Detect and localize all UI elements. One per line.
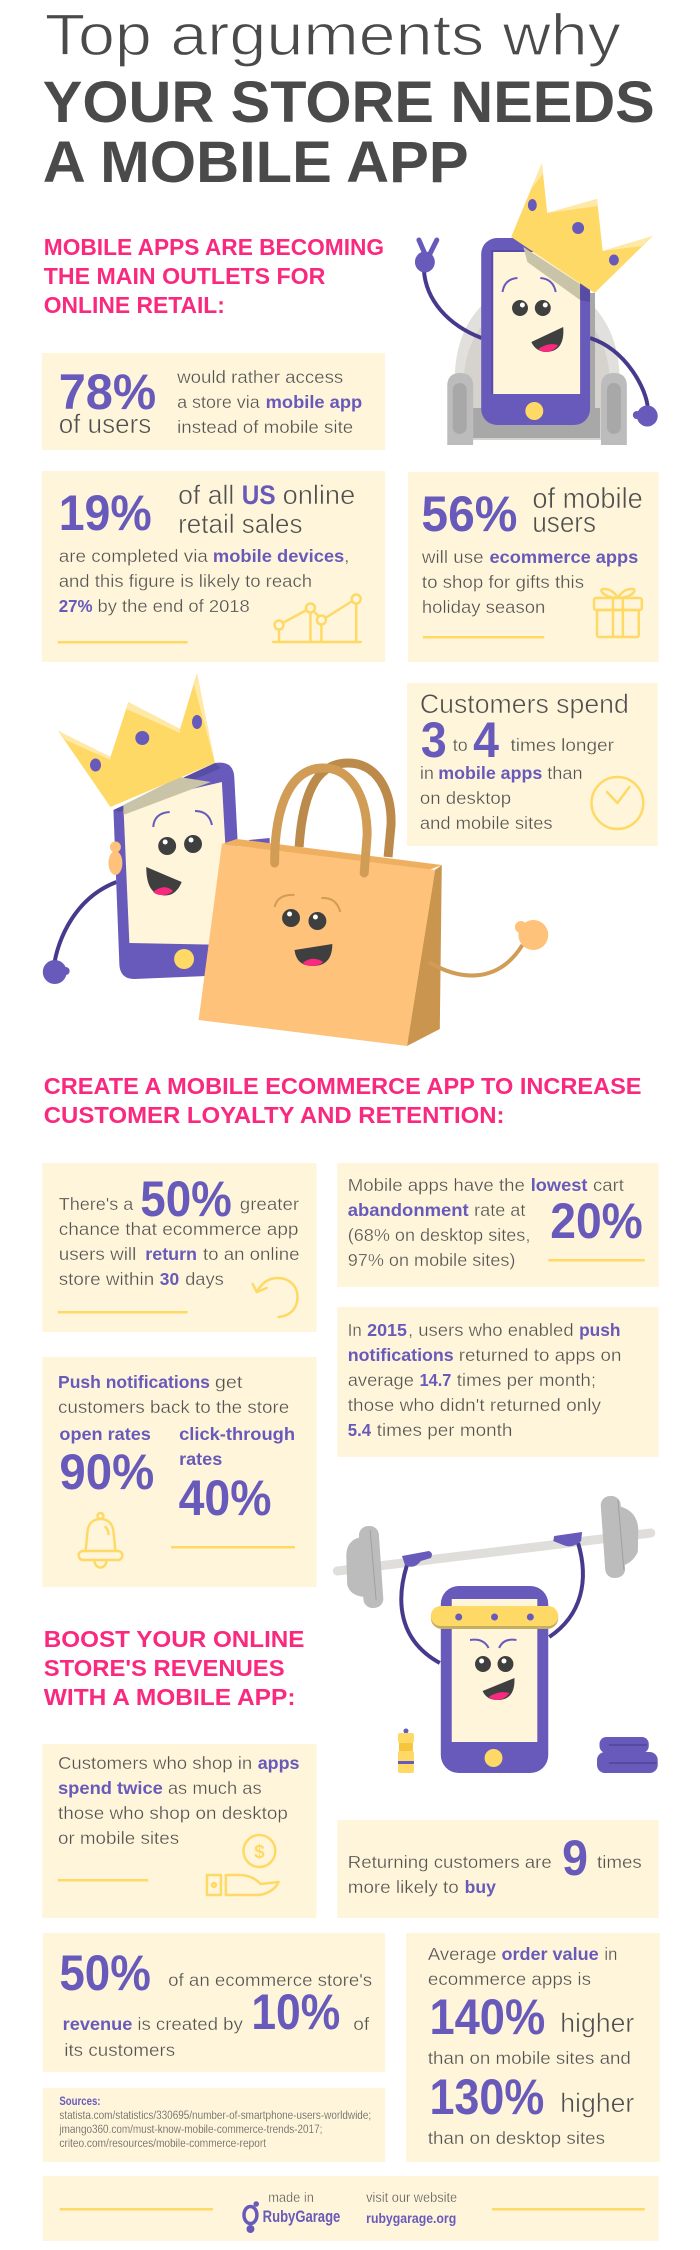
panel: 56% of mobile users: holiday season: [422, 597, 545, 617]
panel: push notifications open and click-through rates: [42, 1357, 316, 1587]
panel: push notifications open and click-through rates: 90%: [59, 1444, 154, 1500]
panel: customers spend 3 to 4 times longer: 4: [473, 712, 499, 768]
panel: 19% of US online retail sales: by the end of 2018: [98, 596, 250, 616]
panel: returning customers 9 times: [337, 1820, 659, 1918]
panel: 19% of US online retail sales: and this figure is likely to reach: [59, 571, 312, 591]
panel: average order value: 140%: [429, 1989, 545, 2045]
panel: customers spend 3 to 4 times longer: to: [453, 735, 468, 755]
heading: boost revenues: [44, 1626, 304, 1710]
panel: average order value: higher: [560, 2008, 634, 2038]
panel: 78% of users: instead of mobile site: [177, 417, 353, 437]
panel: customers spend twice: apps: [258, 1753, 300, 1773]
panel: 19% of US online retail sales: online: [283, 480, 355, 510]
panel: 50% of revenue from 10% of customers: 10%: [251, 1984, 340, 2040]
panel: 50% of revenue from 10% of customers: of: [353, 2014, 370, 2034]
panel: 50% greater chance: There's a: [59, 1194, 133, 1214]
panel: 19% of US online retail sales: are completed via: [59, 546, 208, 566]
panel: customers spend twice: [42, 1744, 316, 1918]
panel: 78% of users: a store via: [177, 392, 260, 412]
panel: 50% greater chance: 50%: [140, 1171, 232, 1227]
panel: 50% greater chance: days: [185, 1269, 224, 1289]
panel: 56% of mobile users: 56%: [421, 486, 517, 542]
panel: 78% of users: 78%: [59, 364, 156, 420]
panel: sources: Sources:: [59, 2096, 100, 2108]
panel: average order value: [406, 1933, 660, 2162]
panel: 50% greater chance: chance that ecommerce app: [59, 1219, 299, 1239]
panel: average order value: than on desktop sites: [428, 2128, 605, 2148]
footer: rubygarage.org: [366, 2210, 456, 2226]
panel: returning customers 9 times: 9: [562, 1830, 588, 1886]
panel: 50% greater chance: 30: [160, 1269, 179, 1289]
icon: return arrow: [253, 1278, 298, 1317]
illustration: phone character with crown in wheelchair: [415, 163, 658, 445]
panel: average order value: higher: [560, 2088, 634, 2118]
panel: 19% of US online retail sales: 27%: [59, 596, 93, 616]
panel: returning customers 9 times: buy: [465, 1877, 496, 1897]
panel: customers spend 3 to 4 times longer: mobile apps: [438, 763, 542, 783]
illustration: phone character lifting a barbell: [337, 1495, 651, 1773]
panel: 19% of US online retail sales: mobile devices: [213, 546, 344, 566]
footer: made in: [268, 2189, 314, 2205]
panel: 50% of revenue from 10% of customers: [43, 1933, 385, 2072]
title: A MOBILE APP: [43, 131, 469, 195]
illustration: crowned phone and shopping bag characters: [43, 673, 548, 1046]
panel: lowest cart abandonment 20%: 20%: [550, 1193, 643, 1249]
panel: customers spend twice: spend twice: [58, 1778, 163, 1798]
heading: main outlets: MOBILE APPS ARE BECOMING: [44, 234, 384, 260]
panel: 50% greater chance: store within: [59, 1269, 154, 1289]
panel: 56% of mobile users: users: [532, 507, 596, 539]
heading: boost revenues: BOOST YOUR ONLINE: [44, 1626, 304, 1652]
panel: lowest cart abandonment 20%: rate at: [474, 1200, 525, 1220]
panel: push notifications open and click-through rates: open rates: [59, 1424, 151, 1444]
panel: push notifications 2015: 5.4: [348, 1420, 371, 1440]
panel: 56% of mobile users: ecommerce apps: [490, 547, 638, 567]
heading: loyalty and retention: [44, 1073, 641, 1128]
panel: average order value: Average: [428, 1944, 497, 1964]
panel: customers spend 3 to 4 times longer: and mobile sites: [420, 813, 553, 833]
icon: stacked towels: [597, 1737, 658, 1773]
icon: hand with coin: [207, 1835, 279, 1895]
panel: push notifications 2015: average: [348, 1370, 414, 1390]
panel: lowest cart abandonment 20%: lowest: [531, 1175, 587, 1195]
panel: 50% of revenue from 10% of customers: revenue: [63, 2014, 132, 2034]
logo: RubyGarage: RubyGarage: [263, 2207, 340, 2226]
panel: push notifications open and click-through rates: get: [215, 1372, 242, 1392]
panel: push notifications 2015: 14.7: [420, 1370, 451, 1390]
icon: growth chart: [273, 594, 361, 642]
panel: 78% of users: mobile app: [266, 392, 362, 412]
heading: boost revenues: STORE'S REVENUES: [44, 1655, 285, 1681]
logo: RubyGarage: [244, 2201, 340, 2233]
title: [43, 4, 655, 195]
panel: 50% of revenue from 10% of customers: its customers: [64, 2040, 175, 2060]
panel: customers spend 3 to 4 times longer: than: [547, 763, 583, 783]
heading: boost revenues: WITH A MOBILE APP:: [44, 1684, 296, 1710]
panel: lowest cart abandonment 20%: cart: [593, 1175, 624, 1195]
panel: 19% of US online retail sales: US: [242, 480, 276, 510]
footer: [43, 2176, 659, 2241]
panel: 50% greater chance: return: [145, 1244, 197, 1264]
panel: sources: [43, 2088, 385, 2162]
panel: 78% of users: of users: [59, 409, 151, 439]
panel: 56% of mobile users: will use: [421, 547, 484, 567]
panel: lowest cart abandonment 20%: 97% on mobile sites): [348, 1250, 515, 1270]
heading: main outlets: THE MAIN OUTLETS FOR: [44, 263, 326, 289]
icon: bell: [79, 1513, 122, 1568]
panel: 56% of mobile users: of mobile: [532, 483, 643, 515]
panel: customers spend twice: Customers who shop in: [58, 1753, 252, 1773]
icon: hand with coin: $: [254, 1842, 265, 1863]
panel: 56% of mobile users: [408, 472, 659, 662]
icon: gift box: [594, 589, 642, 637]
icon: water bottle: [398, 1728, 414, 1773]
panel: sources: criteo.com/resources/mobile-commerce-report: [59, 2138, 267, 2150]
panel: push notifications 2015: push: [579, 1320, 620, 1340]
panel: 19% of US online retail sales: of all: [178, 480, 234, 510]
panel: average order value: 130%: [429, 2069, 544, 2125]
panel: 56% of mobile users: to shop for gifts this: [422, 572, 584, 592]
panel: 78% of users: would rather access: [176, 367, 343, 387]
panel: push notifications open and click-through rates: customers back to the store: [58, 1397, 289, 1417]
panel: push notifications 2015: notifications: [348, 1345, 454, 1365]
panel: 50% greater chance: to an online: [203, 1244, 300, 1264]
panel: lowest cart abandonment 20%: (68% on desktop sites,: [348, 1225, 530, 1245]
panel: push notifications 2015: In: [348, 1320, 362, 1340]
panel: lowest cart abandonment 20%: Mobile apps have the: [348, 1175, 525, 1195]
panel: average order value: order value: [501, 1944, 599, 1964]
panel: customers spend twice: those who shop on desktop: [58, 1803, 288, 1823]
panel: push notifications 2015: those who didn't returned only: [348, 1395, 601, 1415]
panel: customers spend 3 to 4 times longer: 3: [421, 712, 447, 768]
panel: push notifications open and click-through rates: click-through: [179, 1424, 295, 1444]
footer: visit our website: [366, 2189, 457, 2205]
icon: clock: [592, 777, 643, 829]
heading: main outlets: [44, 234, 384, 318]
panel: customers spend 3 to 4 times longer: Customers spend: [420, 689, 629, 719]
panel: customers spend 3 to 4 times longer: [407, 683, 658, 846]
panel: customers spend 3 to 4 times longer: in: [420, 763, 434, 783]
panel: lowest cart abandonment 20%: [337, 1163, 659, 1287]
panel: customers spend twice: as much as: [168, 1778, 262, 1798]
panel: 50% of revenue from 10% of customers: is created by: [137, 2014, 243, 2034]
panel: push notifications 2015: [337, 1307, 659, 1457]
title: Top arguments why: [45, 4, 621, 68]
panel: average order value: ecommerce apps is: [428, 1969, 591, 1989]
panel: returning customers 9 times: Returning customers are: [348, 1852, 552, 1872]
panel: push notifications open and click-through rates: 40%: [179, 1470, 271, 1526]
panel: push notifications 2015: times per month: [377, 1420, 512, 1440]
panel: push notifications 2015: , users who enabled: [408, 1320, 574, 1340]
panel: 19% of US online retail sales: [42, 471, 385, 662]
panel: push notifications 2015: returned to apps on: [459, 1345, 621, 1365]
panel: returning customers 9 times: times: [597, 1852, 642, 1872]
panel: 19% of US online retail sales: ,: [344, 546, 349, 566]
panel: 50% greater chance: greater: [240, 1194, 299, 1214]
panel: 78% of users: [42, 353, 385, 450]
panel: average order value: than on mobile sites and: [428, 2048, 631, 2068]
panel: 50% of revenue from 10% of customers: of an ecommerce store's: [168, 1970, 372, 1990]
title: YOUR STORE NEEDS: [43, 71, 655, 135]
heading: main outlets: ONLINE RETAIL:: [44, 292, 225, 318]
heading: loyalty and retention: CREATE A MOBILE ECOMMERCE APP TO INCREASE: [44, 1073, 641, 1099]
panel: lowest cart abandonment 20%: abandonment: [348, 1200, 469, 1220]
panel: customers spend 3 to 4 times longer: times longer: [510, 735, 614, 755]
panel: 50% of revenue from 10% of customers: 50%: [59, 1945, 151, 2001]
panel: 50% greater chance: users will: [59, 1244, 136, 1264]
panel: 50% greater chance: [42, 1163, 316, 1332]
panel: push notifications open and click-through rates: rates: [179, 1449, 222, 1469]
panel: sources: jmango360.com/must-know-mobile-commerce-trends-2017;: [59, 2124, 322, 2136]
panel: push notifications 2015: times per month;: [457, 1370, 596, 1390]
panel: 19% of US online retail sales: 19%: [59, 485, 152, 541]
panel: customers spend 3 to 4 times longer: on desktop: [420, 788, 511, 808]
panel: returning customers 9 times: more likely to: [348, 1877, 459, 1897]
panel: push notifications open and click-through rates: Push notifications: [58, 1372, 210, 1392]
panel: push notifications 2015: 2015: [367, 1320, 407, 1340]
panel: sources: statista.com/statistics/330695/number-of-smartphone-users-worldwide;: [59, 2110, 371, 2122]
panel: customers spend twice: or mobile sites: [58, 1828, 179, 1848]
panel: 19% of US online retail sales: retail sales: [178, 509, 302, 539]
panel: average order value: in: [604, 1944, 617, 1964]
heading: loyalty and retention: CUSTOMER LOYALTY AND RETENTION:: [44, 1102, 504, 1128]
